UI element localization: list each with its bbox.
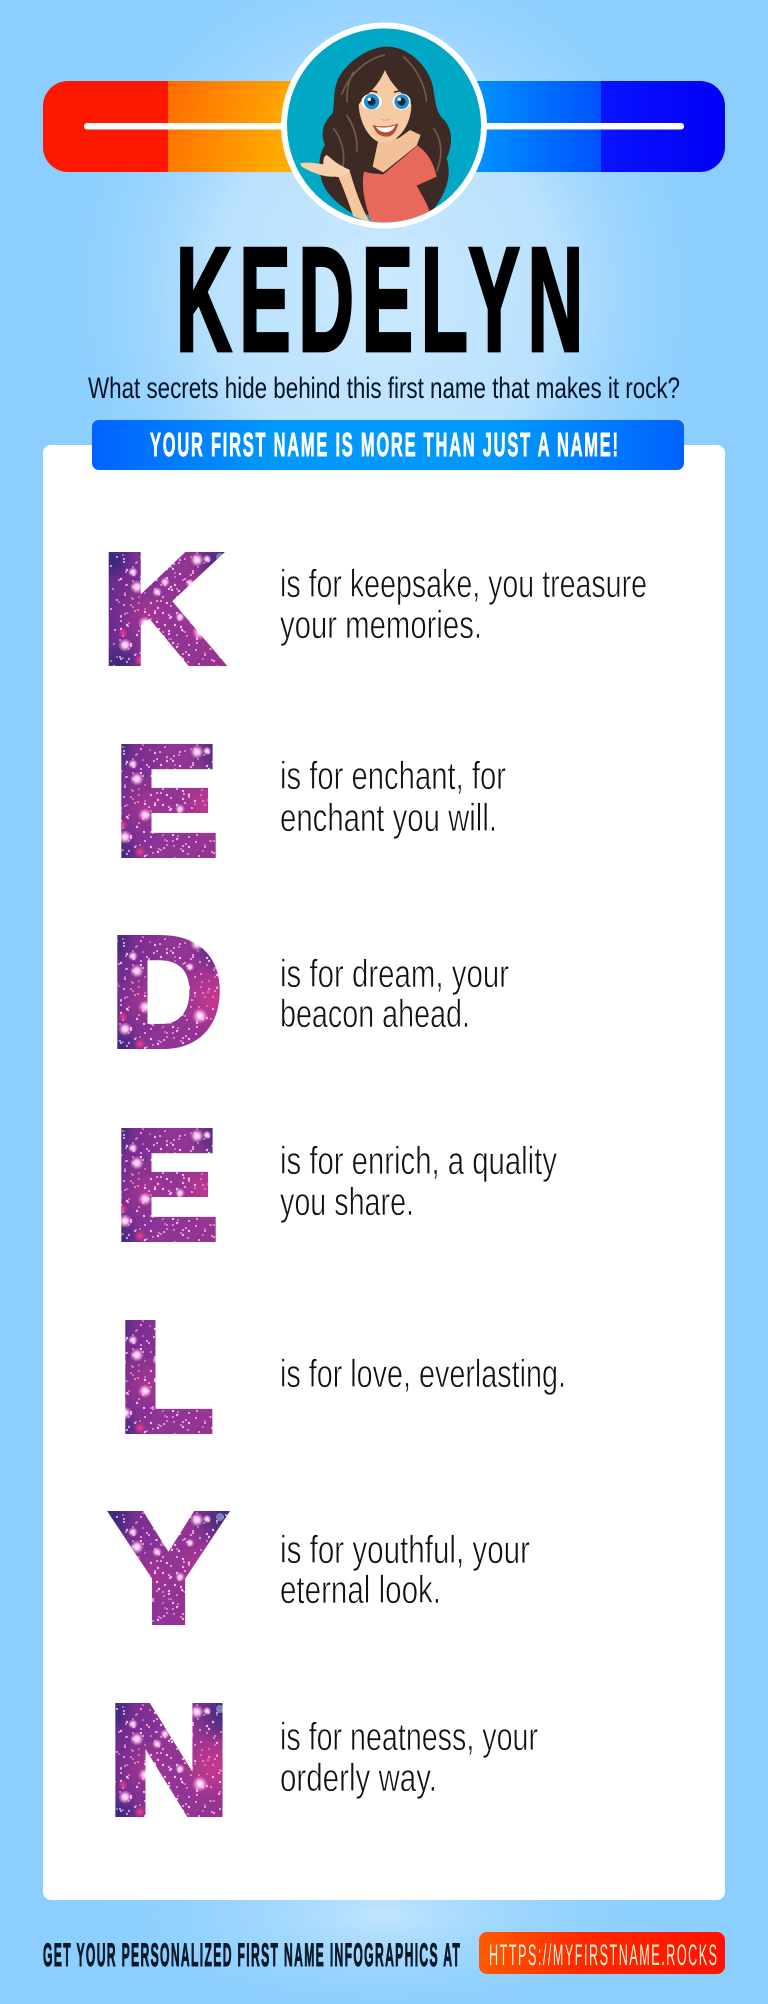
text D: beacon ahead. bbox=[280, 993, 470, 1036]
text E: is for enchant, for bbox=[280, 755, 506, 798]
text K: your memories. bbox=[280, 604, 482, 647]
illustrated woman bbox=[300, 47, 451, 223]
banner: YOUR FIRST NAME IS MORE THAN JUST A NAME! bbox=[150, 426, 618, 464]
text N: is for neatness, your bbox=[280, 1716, 538, 1759]
footer url button: HTTPS://MYFIRSTNAME.ROCKS bbox=[489, 1938, 717, 1972]
letter L: L bbox=[119, 1291, 213, 1463]
footer call to action: GET YOUR PERSONALIZED FIRST NAME INFOGRAPHICS AT bbox=[43, 1938, 460, 1974]
row L bbox=[119, 1291, 566, 1463]
white line across bar bbox=[84, 123, 684, 130]
row E bbox=[115, 715, 517, 887]
text L: is for love, everlasting. bbox=[280, 1353, 566, 1396]
title: KEDELYN bbox=[176, 216, 583, 382]
row N bbox=[108, 1674, 549, 1846]
letter E: E bbox=[115, 715, 218, 887]
text E second: is for enrich, a quality bbox=[280, 1140, 557, 1183]
white content panel bbox=[43, 445, 725, 1900]
letter D: D bbox=[111, 906, 222, 1078]
text E second: you share. bbox=[280, 1181, 414, 1224]
text Y: eternal look. bbox=[280, 1569, 441, 1612]
text E: enchant you will. bbox=[280, 797, 497, 840]
banner bbox=[92, 420, 684, 470]
row K bbox=[102, 523, 658, 695]
row E second bbox=[115, 1099, 568, 1271]
letter K: K bbox=[102, 523, 220, 695]
text Y: is for youthful, your bbox=[280, 1529, 530, 1572]
portrait badge bbox=[281, 22, 487, 228]
text D: is for dream, your bbox=[280, 953, 509, 996]
text N: orderly way. bbox=[280, 1757, 437, 1800]
letter N: N bbox=[108, 1674, 230, 1846]
letter Y: Y bbox=[112, 1482, 225, 1654]
text K: is for keepsake, you treasure bbox=[280, 563, 647, 606]
letter E second: E bbox=[115, 1099, 218, 1271]
row Y bbox=[112, 1482, 541, 1654]
header colour bar bbox=[43, 81, 725, 172]
row D bbox=[111, 906, 520, 1078]
